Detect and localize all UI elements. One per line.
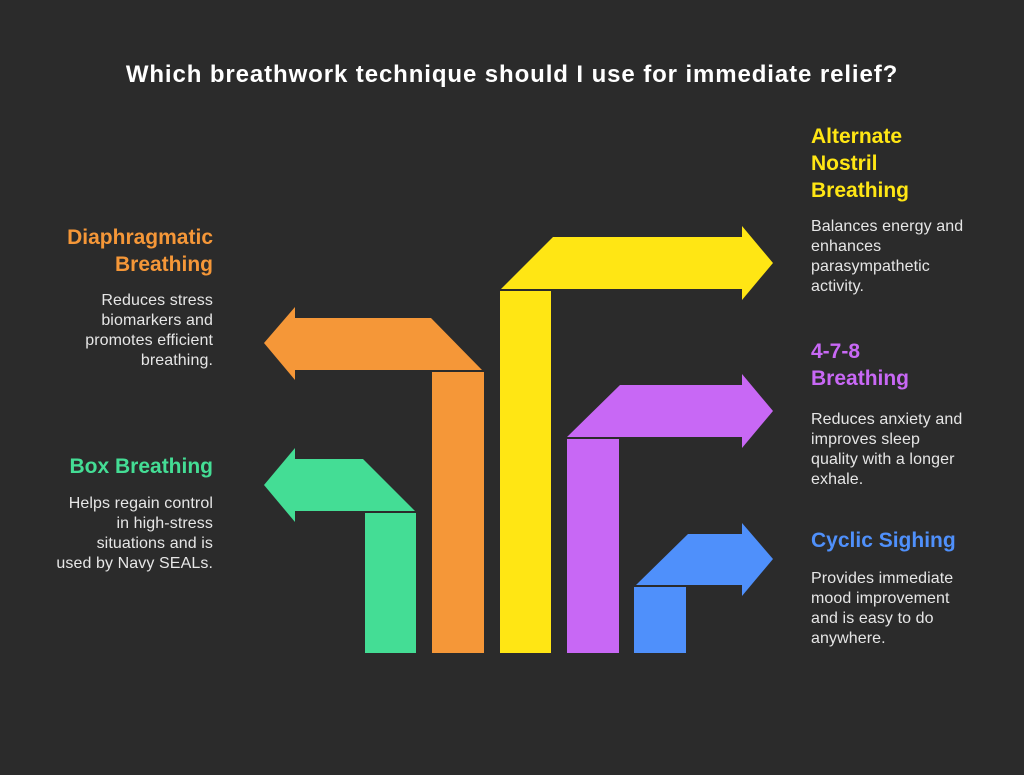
text: 4-7-8	[811, 340, 962, 488]
text: diaphragmatic	[67, 226, 213, 369]
arrow: 4-7-8	[567, 374, 773, 653]
body: biomarkers and	[101, 312, 213, 329]
body: Balances energy and	[811, 218, 963, 235]
arrow: box breathing	[264, 448, 416, 653]
body: situations and is	[97, 535, 213, 552]
arrow: alternate nostril	[500, 226, 773, 653]
body	[811, 218, 963, 295]
heading: Diaphragmatic	[67, 226, 213, 249]
body	[811, 411, 962, 488]
body: parasympathetic	[811, 258, 930, 275]
body: in high-stress	[116, 515, 213, 532]
body: mood improvement	[811, 590, 950, 607]
body: promotes efficient	[85, 332, 213, 349]
heading: Breathing	[811, 179, 909, 202]
body: Reduces anxiety and	[811, 411, 962, 428]
body: enhances	[811, 238, 881, 255]
body	[811, 570, 953, 647]
heading: Box Breathing	[69, 455, 213, 478]
heading: Breathing	[115, 253, 213, 276]
body: quality with a longer	[811, 451, 955, 468]
text: alternate nostril	[811, 125, 963, 295]
body: breathing.	[141, 352, 213, 369]
heading: Nostril	[811, 152, 878, 175]
body: improves sleep	[811, 431, 920, 448]
body: Provides immediate	[811, 570, 953, 587]
heading	[811, 125, 909, 202]
body	[85, 292, 213, 369]
body: and is easy to do	[811, 610, 934, 627]
heading	[811, 340, 909, 390]
heading: Cyclic Sighing	[811, 529, 956, 552]
heading	[67, 226, 213, 276]
title: Which breathwork technique should I use for immediate relief?	[126, 61, 898, 88]
arrow: diaphragmatic	[264, 307, 484, 653]
body: used by Navy SEALs.	[56, 555, 213, 572]
text: box breathing	[56, 455, 213, 572]
text: cyclic sighing	[811, 529, 956, 647]
arrow: cyclic sighing	[634, 523, 773, 653]
body: activity.	[811, 278, 864, 295]
heading: 4-7-8	[811, 340, 860, 363]
body	[56, 495, 213, 572]
heading: Breathing	[811, 367, 909, 390]
body: Reduces stress	[101, 292, 213, 309]
heading: Alternate	[811, 125, 902, 148]
body: Helps regain control	[69, 495, 213, 512]
body: anywhere.	[811, 630, 886, 647]
body: exhale.	[811, 471, 863, 488]
